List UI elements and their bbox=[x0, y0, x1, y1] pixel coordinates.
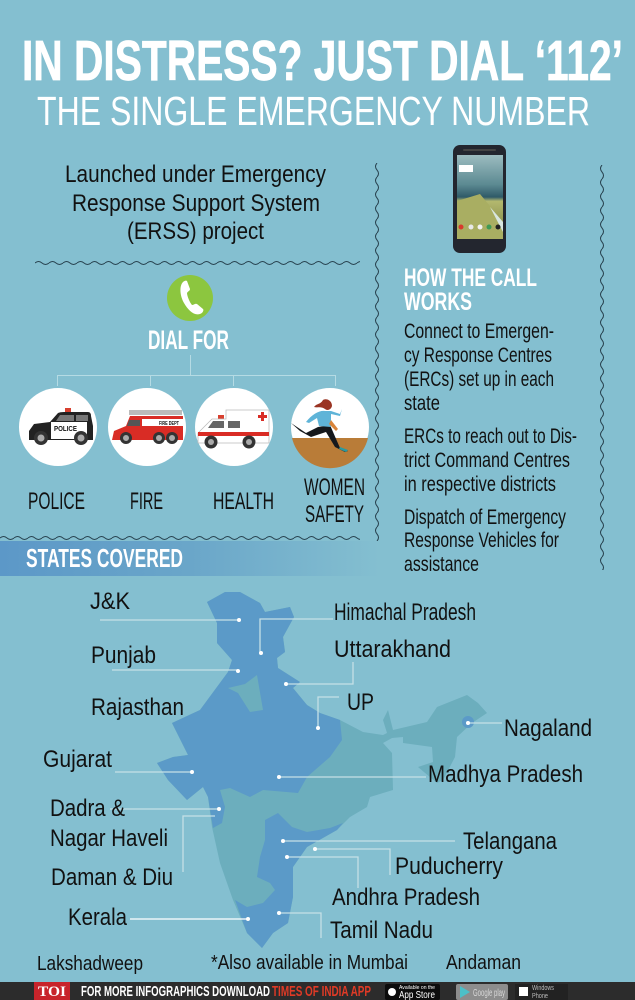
step one text: cy Response Centres bbox=[404, 344, 552, 367]
state labels: Kerala bbox=[68, 904, 128, 931]
intro text block bbox=[65, 161, 326, 245]
category labels bbox=[28, 474, 365, 528]
state labels: Daman & Diu bbox=[51, 864, 173, 891]
state labels: Dadra & bbox=[50, 795, 125, 822]
badge: app store bbox=[385, 984, 440, 1000]
logo: TOI: TOI bbox=[38, 984, 66, 1000]
panel heading bbox=[404, 264, 537, 316]
state labels: Punjab bbox=[91, 642, 156, 669]
panel heading: HOW THE CALL bbox=[404, 264, 537, 292]
leader lines bbox=[100, 619, 502, 938]
state labels: Rajasthan bbox=[91, 694, 184, 721]
category labels: HEALTH bbox=[213, 488, 274, 515]
uncovered haryana area bbox=[228, 675, 263, 712]
panel heading: WORKS bbox=[404, 288, 472, 316]
step three text: assistance bbox=[404, 553, 479, 576]
covered southern states bbox=[235, 813, 343, 948]
category labels: WOMEN bbox=[304, 474, 365, 501]
states covered banner: STATES COVERED bbox=[26, 543, 183, 573]
step three text bbox=[404, 506, 566, 576]
step two text: ERCs to reach out to Dis- bbox=[404, 425, 577, 448]
icon: police car bbox=[19, 388, 97, 466]
state labels: Gujarat bbox=[43, 746, 112, 773]
category labels: POLICE bbox=[28, 488, 85, 515]
icon: police car: POLICE bbox=[54, 426, 77, 433]
state labels: Andhra Pradesh bbox=[332, 884, 480, 911]
icon: running woman bbox=[291, 388, 369, 468]
dial for heading: DIAL FOR bbox=[148, 325, 229, 355]
category labels: FIRE bbox=[130, 488, 163, 515]
state labels: Tamil Nadu bbox=[330, 917, 433, 944]
map of india bbox=[100, 592, 502, 948]
icon: fire engine: FIRE DEPT bbox=[159, 421, 179, 427]
step one text: (ERCs) set up in each bbox=[404, 368, 554, 391]
state labels: UP bbox=[347, 689, 374, 716]
icon: ambulance bbox=[195, 388, 273, 466]
badge: windows phone bbox=[515, 984, 568, 1000]
state labels: Andaman bbox=[446, 952, 521, 974]
badge: google play bbox=[456, 984, 508, 1000]
step one text bbox=[404, 320, 554, 415]
step three text: Dispatch of Emergency bbox=[404, 506, 566, 529]
state labels: Telangana bbox=[463, 828, 558, 855]
icon: green phone bbox=[167, 275, 213, 321]
icon: fire engine bbox=[108, 388, 186, 466]
intro text block: (ERSS) project bbox=[127, 218, 264, 245]
step three text: Response Vehicles for bbox=[404, 529, 559, 552]
state labels: Madhya Pradesh bbox=[428, 761, 583, 788]
step two text bbox=[404, 425, 577, 496]
how the call works panel bbox=[404, 264, 577, 576]
icon: smartphone bbox=[453, 145, 506, 253]
covered north and central states bbox=[157, 592, 342, 828]
state labels: Lakshadweep bbox=[37, 953, 143, 975]
nagaland marker bbox=[462, 716, 474, 728]
map base: uncovered states bbox=[157, 592, 487, 948]
badge: windows phone: Windows bbox=[532, 985, 554, 992]
badge: app store: Available on the bbox=[399, 985, 435, 991]
step one text: state bbox=[404, 392, 440, 415]
state labels: Puducherry bbox=[395, 853, 503, 880]
intro text block: Launched under Emergency bbox=[65, 161, 326, 188]
category labels: SAFETY bbox=[305, 501, 364, 528]
state labels: Uttarakhand bbox=[334, 636, 451, 663]
state labels: J&K bbox=[90, 588, 130, 615]
state labels: Himachal Pradesh bbox=[334, 599, 476, 626]
state labels bbox=[37, 588, 592, 975]
state labels: Nagar Haveli bbox=[50, 825, 168, 852]
states covered banner bbox=[0, 541, 380, 576]
footer message: FOR MORE INFOGRAPHICS DOWNLOAD bbox=[81, 983, 270, 1000]
badge: windows phone: Phone bbox=[532, 993, 548, 1000]
footnote: *Also available in Mumbai bbox=[211, 952, 408, 974]
intro text block: Response Support System bbox=[72, 190, 320, 217]
footer app name: TIMES OF INDIA APP bbox=[272, 983, 371, 1000]
state labels: Nagaland bbox=[504, 715, 592, 742]
location dots bbox=[190, 618, 470, 921]
step two text: in respective districts bbox=[404, 473, 556, 496]
step one text: Connect to Emergen- bbox=[404, 320, 554, 343]
step two text: trict Command Centres bbox=[404, 449, 570, 472]
badge: google play: Google play bbox=[473, 988, 505, 999]
logo: TOI bbox=[34, 982, 70, 1000]
footer bar bbox=[0, 982, 635, 1000]
